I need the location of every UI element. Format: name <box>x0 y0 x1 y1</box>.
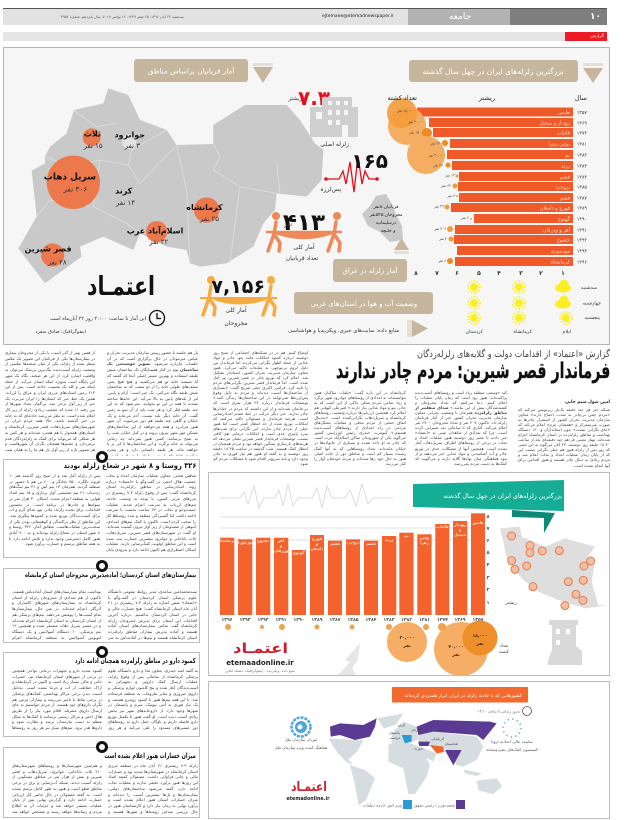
stat: total deaths with stretcher figures: تعداد قربانیان <box>286 256 318 262</box>
weather labels: ایلام <box>562 329 571 335</box>
news box 3 <box>3 652 200 737</box>
year labels <box>577 110 587 266</box>
Iran map with markers <box>500 527 607 610</box>
world map: آلمان <box>398 724 406 728</box>
legend: وزیر امور خارجه دیپلمات <box>363 802 402 808</box>
note: EU: کمیسیون کمک‌های بشردوستانه <box>486 747 538 752</box>
year labels: ۱۳۸۲ <box>577 152 587 158</box>
bar labels: قائنات <box>557 130 571 136</box>
column years: ۱۳۸۹ <box>312 617 323 623</box>
table column headings: ریشتر <box>478 94 495 102</box>
logo: Etemad: اعتمـاد <box>87 272 155 302</box>
column labels: بوئین <box>419 535 430 540</box>
year labels: ۱۳۹۶ <box>577 260 587 266</box>
bar labels: زرند <box>561 164 571 170</box>
column labels: بم <box>404 533 409 538</box>
note: UN: میزبان سازمان ملل <box>285 737 317 742</box>
city: Karand: کرند <box>115 187 133 196</box>
city: Eslamabad-e Gharb <box>127 221 184 246</box>
date line: سه‌شنبه ۲۳ آبان ۱۳۹۶، ۲۵ صفر ۱۴۳۹، ۱۴ نوامبر ۲۰۱۷، سال پانزدهم، شماره ۳۹۵۴ <box>61 15 184 19</box>
year labels: ۱۳۸۳ <box>577 164 587 170</box>
column labels: اهر <box>277 538 284 543</box>
year labels: ۱۳۹۳ <box>577 248 587 254</box>
panel: top infographic <box>3 47 610 345</box>
column value axis: ریشتر <box>504 601 517 606</box>
bubbles: death tolls: ۱۸,۰۰۰ <box>472 634 488 639</box>
column years: ۱۳۸۲ <box>401 617 412 623</box>
column years: ۱۳۹۱ <box>276 617 286 623</box>
death toll bubbles: ۳۹ نفر <box>433 204 444 208</box>
column labels: طبس <box>473 520 484 525</box>
article column 2: کند «وسعت منطقه زیاد است و روستاهای آسیب‌دیده پراکنده‌اند. هنوز زود است که زمان پایان عملیات را اعلام کنیم. دعا می‌کنیم که تعداد مجروحان و کشته‌شدگان بیش از این نباشد.» صدای منقلبتر از مناطق زلزله‌زده همزمان با وضعیت بحرانی معاون سازمان مدیریت بحران کشور خبر از آمار قربانیان زلزله داد: تاکنون ۴۰۷ نفر و تعداد مجروحان ۶۷۰۰ نفر اعلام می‌کند. آماری که تا ساعاتی بعد تغییراتی کرده است، چرا که تعدادی از شاهدان عینی به «اعتماد» خبر دادند تا عصر روز دوشنبه هنوز عملیات امداد و نجات در برخی از روستاهای اطراف سرپل‌ذهاب آغاز نشده است. همچنین آنها از مشکلات جدی در توزیع چادر و آب آشامیدنی و مواد غذایی خبر می‌دهند و از نبود هماهنگی میان نهادها گلایه دارند و می‌گویند که کمک‌ها به دست مردم نمی‌رسد. <box>415 390 507 466</box>
heading: weather: وضعیت آب و هوا در استان‌های غربی <box>311 299 417 308</box>
weather labels <box>465 286 601 335</box>
column labels <box>218 520 484 555</box>
news box 4 badge <box>96 741 108 753</box>
article column 4: اوضاع کنیم. هم در در شبکه‌های اجتماعی از صبح روز دوشنبه درباره کمبود امکانات مانند پتو، چادر و مواد غذایی از جمله اظهار نگرانی می‌کردند اما فرماندار بین دلیل لزوم بی‌توجهی به شایعات تاکید می‌کرد. هنوز معاون سازمان مدیریت بحران کشور، استاندار تشکیل شد. اعلام کرد که توزیع چادر در قصر شیرین نیز آغاز شده است. اما فرماندار قصر شیرین نگرانی‌های مردم را تایید کرد. فرامرز اکبری خیلی صریح گفت: «بسیاری از ساختمان‌ها آسیب دیده‌اند و مردم به دلیل وقوع پس‌لرزه‌ها نمی‌توانند در این ساختمان‌ها زندگی کنند.» توضیحات فرماندار درباره ۲۴ هزار نفری است که بی‌خانمان شده‌اند و از این داشتند که مردم در خیابان‌ها چادر ندارند. خبر دیگر حرکت در خط مقدم امدادرسانی است. هرچند فرماندار و مسئولان تاکید می‌کنند که امکانات توزیع شده از حد انتظار کمتر است اما هنوز خیلی از مردم چادر ندارند. این نگرانی برای شب‌های سرد پاییزی جدی است و امکانات درمانی هم کافی نیست. توضیحات فرماندار قصر شیرین نشان می‌دهد که هزینه‌های بازسازی سنگین خواهد بود و مردم همچنان در انتظار کمک هستند. شب گذشته در ساعت ۱۸:۴۵ دقیقه روز دوشنبه و به گفته او هنوز هم نیاز فوری به چادر وجود دارد و باید سریع‌تر اقدام شود تا مشکلات مردم کم شود. <box>213 350 308 466</box>
weather labels: کرمانشاه <box>513 329 533 335</box>
city: Eslamabad-e Gharb: اسلام‌آباد غرب <box>127 225 184 235</box>
bubbles: death tolls: نفر <box>475 642 484 647</box>
heading: victims by region: آمار قربانیان براساس مناطق <box>148 66 235 76</box>
bubbles: death tolls: نفر <box>402 644 411 649</box>
heading: victims by region <box>134 59 248 82</box>
bar labels: مورموری <box>551 248 570 254</box>
world map: پاکستان <box>389 731 400 735</box>
year labels: ۱۳۸۵ <box>577 184 587 190</box>
city: Qasr-e Shirin <box>25 243 72 267</box>
death toll bubbles: ۳۰,۰۰۰ نفر <box>427 154 445 158</box>
news box 2 headline: بیمارستان‌های استان کردستان؛ آماده‌پذیرش مجروحان استان کرمانشاه <box>25 571 196 579</box>
world map: اتریش <box>411 728 420 732</box>
label: main quake: زلزله اصلی <box>320 141 349 148</box>
news box 4 headline: میزان خسارات هنوز اعلام نشده است <box>105 752 196 760</box>
bubbles: death tolls: ۳۰,۰۰۰ <box>399 635 415 641</box>
news box 3 headline: کمبود دارو در مناطق زلزله‌زده همچنان ادامه دارد <box>75 657 196 665</box>
bubbles: death tolls: کشته <box>499 649 510 655</box>
source note with arrow: منابع داده: سایت‌های خبری، ویکی‌پدیا و هواشناسی <box>288 327 399 334</box>
heading: biggest quakes: بزرگترین زلزله‌های ایران در چهل سال گذشته <box>422 67 564 76</box>
magnitude axis: ۱ <box>561 270 565 277</box>
column years: ۱۳۹۶ <box>222 617 233 623</box>
news box 1 badge <box>96 451 108 463</box>
column labels: دامغان <box>311 546 323 551</box>
city: Javanrud <box>114 130 145 150</box>
column labels: ورزقان <box>274 548 289 553</box>
column labels: قشم <box>366 541 376 546</box>
bar chart: magnitude by year <box>417 108 573 266</box>
logo: Etemad online third panel: etemadonline.ir <box>287 796 330 802</box>
column years: ۱۳۹۳ <box>240 617 251 623</box>
orange banner: کشورهایی که با حادثه زلزله در ایران ابراز همدردی کرده‌اند <box>405 693 523 699</box>
stat: aftershocks: پس‌لرزه <box>320 186 341 193</box>
note: EU: نماینده عالی اتحادیه اروپا <box>491 739 533 744</box>
column years: ۱۳۷۴ <box>437 617 448 623</box>
death toll bubbles: ۴ نفر <box>438 237 447 241</box>
death toll bubbles: ۶ نفر <box>437 259 446 263</box>
column years: ۱۳۹۲ <box>258 617 269 623</box>
magnitude axis: ۵ <box>477 270 481 277</box>
grid lines <box>220 517 488 540</box>
city: Qasr-e Shirin: قصر شیرین <box>25 245 72 254</box>
stat: total injured with stretcher figures: آمار کلی <box>225 305 247 314</box>
bar labels: فهرج و دامغان <box>540 206 571 212</box>
stat: main quake magnitude: ۷.۳ <box>298 86 330 110</box>
note: UN <box>275 737 327 750</box>
icon: triangle down left <box>253 63 273 83</box>
city: Karand <box>115 187 135 207</box>
year labels: ۱۳۷۴ <box>577 130 587 136</box>
city: Eslamabad-e Gharb: ۲۲ نفر <box>148 238 169 246</box>
column years: ۱۳۸۵ <box>348 617 359 623</box>
column value axis: ۱ <box>487 601 489 606</box>
article column 3: کرمانشاه در این باره گفت: «تلفات ساکنان هنوز نتوانسته‌اند به امدادی از روستاهای جوانرود شهر برگرد و زیاد تمامی مردم محلی حاکی از این است که به چادر، پتو و مواد غذایی نیاز دارند.» امیرعلی کیهانی هم اعلام کرد همچنین ارزیابی‌ها درباره وضعیت روستاهای کرمانشاه و سرپل‌ذهاب نگرانی‌کننده است. «به‌دنبال اتفاق جمعی از مردم محلی و مقامات تشکل‌های مردمی در راه امدادی از روستاهای آسیب‌دیده هستیم.» کیومرث حیدری رئیس اورژانس کشور می‌گوید یکی از شهروندان ساکن اسلام‌آباد غرب است که چادر به او داده نشده و بسیاری از خانواده‌ها در خیابان مانده‌اند. تعداد روستاهایی که به آنها کمک رسیده بسیار کم است و مناطق دور از جاده اصلی هنوز به حال خود رها شده‌اند و مردم خودشان آوار را کنار می‌زنند. <box>314 390 406 466</box>
column labels: قشم <box>330 541 340 546</box>
column labels: خشوج <box>257 538 269 543</box>
stat: total deaths with stretcher figures <box>266 210 342 262</box>
stat: aftershocks <box>320 149 388 193</box>
bar labels: کرمانشاه <box>551 260 571 266</box>
icon: UN emblem <box>292 718 310 736</box>
email: ejtemaee@etemadnewspaper.ir <box>322 14 394 19</box>
bubbles: death tolls <box>225 620 510 676</box>
bar labels: اهر و ورزقان <box>543 228 570 234</box>
news box 4 <box>3 747 200 818</box>
death toll bubbles: ۶۲ نفر <box>440 184 451 188</box>
legend: نخست‌وزیر / رئیس جمهور <box>413 802 455 808</box>
bar labels: خشوج <box>557 238 570 244</box>
column labels: قائنات <box>436 524 449 529</box>
year labels: ۱۳۹۲ <box>577 238 587 244</box>
Iraq map with casualties: مجروحان:۵۲۵نفر <box>369 212 403 218</box>
magnitude axis: ۴ <box>497 270 501 277</box>
city: Salas <box>83 128 103 150</box>
report strip <box>3 32 607 41</box>
stat: total deaths with stretcher figures: آمار کلی <box>293 242 315 251</box>
news box 1 headline: ۳۲۶ روستا و ۸ شهر در شعاع زلزله بودند <box>63 461 196 470</box>
source note with arrow <box>288 320 428 337</box>
byline: امین شول سیم جانی <box>565 400 610 405</box>
column years: ۱۳۸۷ <box>330 617 341 623</box>
death toll bubbles: ۳۰۶ نفر <box>433 227 446 231</box>
heading: Iraq <box>333 259 407 282</box>
column value axis <box>487 515 517 606</box>
world map <box>328 713 502 805</box>
column labels: و <box>279 543 283 548</box>
heading: weather <box>294 292 433 314</box>
city: Qasr-e Shirin: ۲۸ نفر <box>47 258 67 266</box>
bar chart: orange columns <box>220 513 485 615</box>
column labels: بروجرد <box>346 540 360 544</box>
year labels: ۱۳۸۱ <box>577 142 587 148</box>
world map: سوریه <box>414 746 424 750</box>
clock note <box>478 706 532 716</box>
page number: ۱۰ <box>590 12 601 22</box>
column years <box>222 617 484 623</box>
city: Karand: ۱۴ نفر <box>115 199 135 207</box>
decoration: gray crack shape <box>338 643 360 675</box>
world map: آذربایجان <box>431 737 445 741</box>
Iraq map with casualties: درسلیمانیه <box>376 221 396 226</box>
heading: biggest quakes <box>409 60 578 82</box>
sun icons <box>470 284 570 322</box>
death toll bubbles: ۱۵۰۰ نفر <box>408 130 423 134</box>
bar labels: قشم <box>560 196 571 202</box>
bar labels: رودبار و منجیل <box>539 120 571 126</box>
column years: ۱۳۶۹ <box>454 617 466 623</box>
column years: ۱۳۵۷ <box>472 617 484 623</box>
magnitude axis: ۳ <box>519 270 523 277</box>
news box 3 badge <box>96 646 108 658</box>
page header bar <box>3 8 607 25</box>
weather labels: کردستان <box>465 329 484 335</box>
bubbles: death tolls: تعداد <box>500 644 509 649</box>
weather icons grid <box>465 280 601 335</box>
world map: افغانستان <box>445 742 458 746</box>
news box 2 <box>3 568 200 643</box>
panel: third infographic frame <box>208 682 610 818</box>
icon: cracked building gray <box>548 620 582 665</box>
logo: Etemad online third panel <box>287 780 330 802</box>
map of Kermanshah province <box>18 88 323 283</box>
Iraq map with casualties: و حلبچه <box>381 229 395 234</box>
column labels: فهرج <box>312 536 323 541</box>
city: Kermanshah: ۲۵ نفر <box>199 215 219 223</box>
stat: total injured with stretcher figures: مجروحان <box>224 320 248 327</box>
credit: اینفوگرافیک: صادق منفرد <box>35 328 86 335</box>
magnitude axis: ۲ <box>539 270 543 277</box>
column labels: رودبار <box>453 522 466 527</box>
city: Sarpol-e Zahab <box>44 156 100 209</box>
note: EU <box>486 739 538 752</box>
stat: aftershocks: ۱۶۵ <box>351 149 388 173</box>
orange banner <box>392 687 528 702</box>
weather labels: پنجشنبه <box>584 316 601 321</box>
table column headings: تعداد کشته <box>388 94 417 102</box>
column labels: کرمانشاه <box>218 538 237 543</box>
teal banner <box>413 480 564 533</box>
column value axis: ۴ <box>487 563 490 568</box>
stat: main quake magnitude: ریشتر <box>287 96 302 102</box>
city: Kermanshah: کرمانشاه <box>186 203 223 212</box>
table column headings <box>388 94 587 102</box>
city: Sarpol-e Zahab: ۳۰۶ نفر <box>62 185 87 194</box>
icon: triangle up <box>394 238 409 254</box>
Iraq map with casualties: قربانیان:۸نفر <box>372 205 399 210</box>
news box 1 <box>3 459 200 558</box>
stat: total deaths with stretcher figures: ۴۱۳ <box>283 210 325 236</box>
Iraq map with casualties <box>362 194 403 242</box>
section name <box>408 9 510 25</box>
world map: فرانسه <box>390 736 400 740</box>
column labels: و <box>458 527 462 532</box>
death toll bubbles: ۱۳ نفر <box>444 174 455 178</box>
article kicker: گزارش «اعتماد» از اقدامات دولت و گلایه‌های زلزله‌زدگان <box>417 349 610 360</box>
year labels: ۱۳۹۰ <box>577 216 587 222</box>
logo: Etemad online red: etemaadonline.ir <box>226 659 294 667</box>
bubbles: death tolls: ۴۰,۰۰۰ <box>448 645 464 650</box>
logo: Etemad online red: منبع داده: ویکی‌پدیا - اینفوگرافیک: اعتماد آنلاین <box>225 668 295 673</box>
year labels: ۱۳۸۹ <box>577 206 587 212</box>
ECG line decoration <box>220 484 393 508</box>
year labels: ۱۳۵۷ <box>577 110 587 116</box>
death toll bubbles: ۱۸,۰۰۰ نفر <box>396 109 414 113</box>
column value axis: ۸ <box>487 515 490 520</box>
column labels: مورموری <box>236 540 254 544</box>
icon: cracked building <box>310 97 358 137</box>
bubbles: death tolls: نفر <box>451 653 460 658</box>
column years: ۱۳۸۳ <box>384 617 395 623</box>
heading: Iraq: آمار زلزله در عراق <box>342 266 399 275</box>
news box 2 badge <box>96 560 108 572</box>
page number <box>510 9 607 25</box>
column labels: گهنوج <box>293 550 306 555</box>
magnitude axis: ۶ <box>455 270 459 277</box>
news box 1 text left: پس از زلزله آغاز شد و از صبح روز گذشته هم ۱۰ فروند بالگرد، ۷۵۰ نجاتگر و ۶۰۰ تن هم با حضور در منطقه گردند. همزمان ۱۳ تیم آنتن و ۳۱ تیم سگ‌های زنده‌یاب ۲۱ تیم تخصصی آوار برداری و ۱۵ تیم امداد هوایی به منطقه اعزام شدند. اسکان ۳۰ هزار نفر در سوله‌ها و چادرها در برنامه است. در نخستین اقدامات، برای تجدید زلزله، چادر، پتو، غذای گرم و آب برای آسیب‌دیدگان توزیع شده و کمبودها پیگیری شد. این مناطق از نظر پراکندگی و کوهستانی بودن یکی از سخت‌ترین عملیات‌هاست. مطابق آمار، ۳۲۶ روستا و ۸ شهر استان در شعاع زلزله بوده‌اند و به ۷۰۰ آبادی هنوز کامل دسترسی وجود ندارد و تلاش ادامه دارد تا به همه مناطق برسیم و خسارت برآورد شود. <box>9 473 100 546</box>
city: Kermanshah <box>186 197 223 223</box>
icon: clock <box>150 310 164 326</box>
section name: جامعه <box>449 12 471 22</box>
bar labels: گهنوج <box>558 216 571 222</box>
note: UN: هماهنگ کننده ویژه سازمان ملل <box>275 745 327 750</box>
bar labels: قشم <box>560 174 571 180</box>
panel: second infographic frame <box>208 472 610 676</box>
column value axis: ۶ <box>487 539 490 544</box>
column labels: منجیل <box>454 532 467 537</box>
stat: total deaths with stretcher figures: نفر <box>283 221 292 228</box>
year labels: ۱۳۹۱ <box>577 228 587 234</box>
city: Salas: ۱۵ نفر <box>83 142 103 150</box>
column labels: زرند <box>385 537 393 542</box>
teal banner: بزرگترین زلزله‌های ایران در چهل سال گذشته <box>444 492 562 500</box>
red tag <box>565 32 607 41</box>
bar labels: بوئین زهرا <box>549 142 570 148</box>
logo: Etemad online third panel: اعتمـاد <box>291 780 327 795</box>
note: data time: این آمار تا ساعت: ۲۰:۰۰ روز ۲۲ آبان‌ماه است <box>50 315 146 322</box>
stat: total injured with stretcher figures <box>200 276 277 327</box>
magnitude axis <box>414 270 565 277</box>
death toll bubbles: ۲۶۰ نفر <box>429 142 442 146</box>
column labels: و <box>315 541 319 546</box>
column years: ۱۳۸۱ <box>419 617 430 623</box>
city: Salas: ثلاث <box>84 130 101 139</box>
death toll bubbles: ۲ نفر <box>460 216 469 220</box>
icon: triangle down right <box>583 63 603 83</box>
stat: total injured with stretcher figures: ۷,۱۵۶ <box>211 276 265 298</box>
bar labels: بم <box>565 152 570 158</box>
table column headings: سال <box>575 94 587 102</box>
column years: ۱۳۹۰ <box>294 617 304 623</box>
magnitude axis: ۷ <box>435 270 439 277</box>
city: Javanrud: جوانرود <box>114 130 145 139</box>
city: Sarpol-e Zahab: سریل ذهاب <box>44 172 96 182</box>
bar labels <box>539 110 571 266</box>
column value axis: ۳ <box>487 575 490 581</box>
logo: Etemad online red: اعتمـاد <box>233 641 288 657</box>
article headline: فرماندار قصر شیرین: مردم چادر ندارند <box>336 359 610 384</box>
column value axis: ۲ <box>487 587 490 593</box>
weather labels: سه‌شنبه <box>581 286 597 291</box>
icon: EU stars <box>503 719 521 737</box>
bar labels: طبس <box>558 110 570 116</box>
clock note: به‌روز رسانی تا ساعت ۱۳:۱۰ <box>478 710 520 714</box>
death toll bubbles: ۴۰,۰۰۰ نفر <box>407 120 425 124</box>
death toll bubbles <box>387 98 472 264</box>
legend <box>363 800 465 809</box>
year labels: ۱۳۸۷ <box>577 196 587 202</box>
death toll bubbles: ۷ نفر <box>446 194 455 198</box>
column labels: زهرا <box>420 540 429 545</box>
death toll bubbles: ۲۶۰ نفر <box>432 164 445 168</box>
article column 1: شبکه خبر هر چند دقیقه یک‌بار زیرنویس می‌کند که «مردم چمن بی‌چادر به شدت احتیاج دارند» معاون سازمان مدیریت بحران کشور از استقرار چادرها به صورت غیرمتمرکز و «همچنان عزم» اعلام می‌کند که «جای نگرانی نیست» چون استانداران و ۱۲۰ دستگاه بهداشت و مناطق زلزله‌زده در استان کرمانشاه اعزام شده‌اند. بهناز معینی فر هم چند دقیقه‌ای بعد از ساعت ۱۸:۴۰ دقیقه روز دوشنبه، ۲۲ آبان می‌گوید به این معنی که روز بس از زلزله هنوز هم خیلی نگرانی نیست این که از پایان زمان عملیات امداد و نجات اعلام شد و مردم زیادی به دنبال چادر هستند و هنوز اقدامی برای آنها انجام نشده است. <box>518 407 610 468</box>
bar labels: بروجرد <box>555 184 570 190</box>
red tag: گزارش <box>590 34 604 39</box>
column value axis: ۷ <box>487 527 490 532</box>
city: Javanrud: ۳ نفر <box>124 142 140 150</box>
cloud icons <box>555 280 571 308</box>
year labels: ۱۳۸۴ <box>577 174 587 180</box>
year labels: ۱۳۶۹ <box>577 120 587 126</box>
column value axis: ۵ <box>487 551 490 556</box>
column years: ۱۳۸۴ <box>366 617 377 623</box>
logo: Etemad online red <box>225 641 295 673</box>
weather labels: چهارشنبه <box>583 300 601 306</box>
magnitude axis: ۸ <box>414 270 418 277</box>
